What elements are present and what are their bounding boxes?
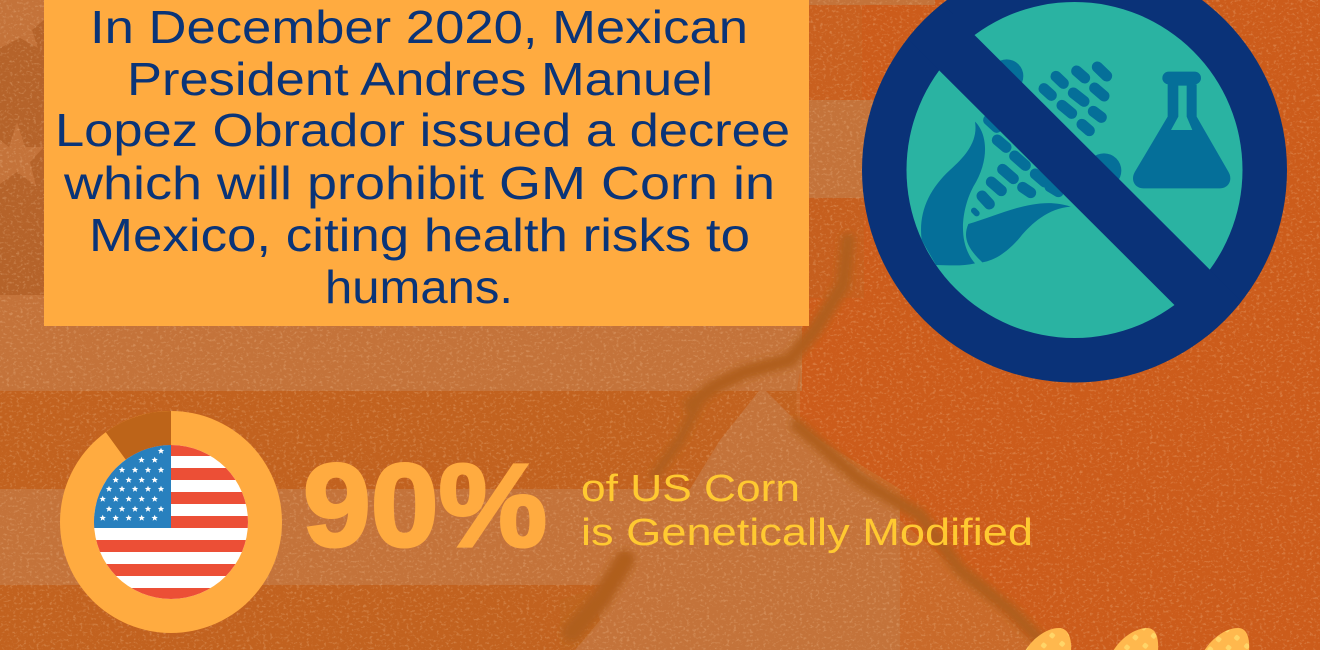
icon: corn cob bbox=[921, 59, 1121, 265]
statement text: President Andres Manuel bbox=[127, 53, 713, 105]
icon: corn kernels at bottom edge bbox=[1025, 628, 1249, 650]
donut chart: 90 percent with US flag bbox=[60, 411, 282, 633]
statement text: Lopez Obrador issued a decree bbox=[55, 104, 790, 156]
icon: US flag bbox=[94, 445, 248, 600]
statement text: Mexico, citing health risks to bbox=[89, 209, 750, 261]
statement text: humans. bbox=[325, 261, 513, 313]
statistic caption: is Genetically Modified bbox=[581, 512, 1033, 554]
statement text: which will prohibit GM Corn in bbox=[63, 157, 775, 209]
icon: laboratory flask bbox=[1133, 72, 1230, 188]
statement text: In December 2020, Mexican bbox=[90, 1, 748, 53]
statement text bbox=[55, 1, 790, 313]
prohibition slash bbox=[900, 0, 1250, 345]
statistic caption: of US Corn bbox=[581, 468, 800, 510]
icon: prohibited GM corn and flask bbox=[862, 0, 1287, 382]
statistic: 90%: 90% bbox=[303, 440, 547, 572]
text panel: decree statement bbox=[44, 0, 809, 326]
statistic caption bbox=[581, 468, 1033, 554]
